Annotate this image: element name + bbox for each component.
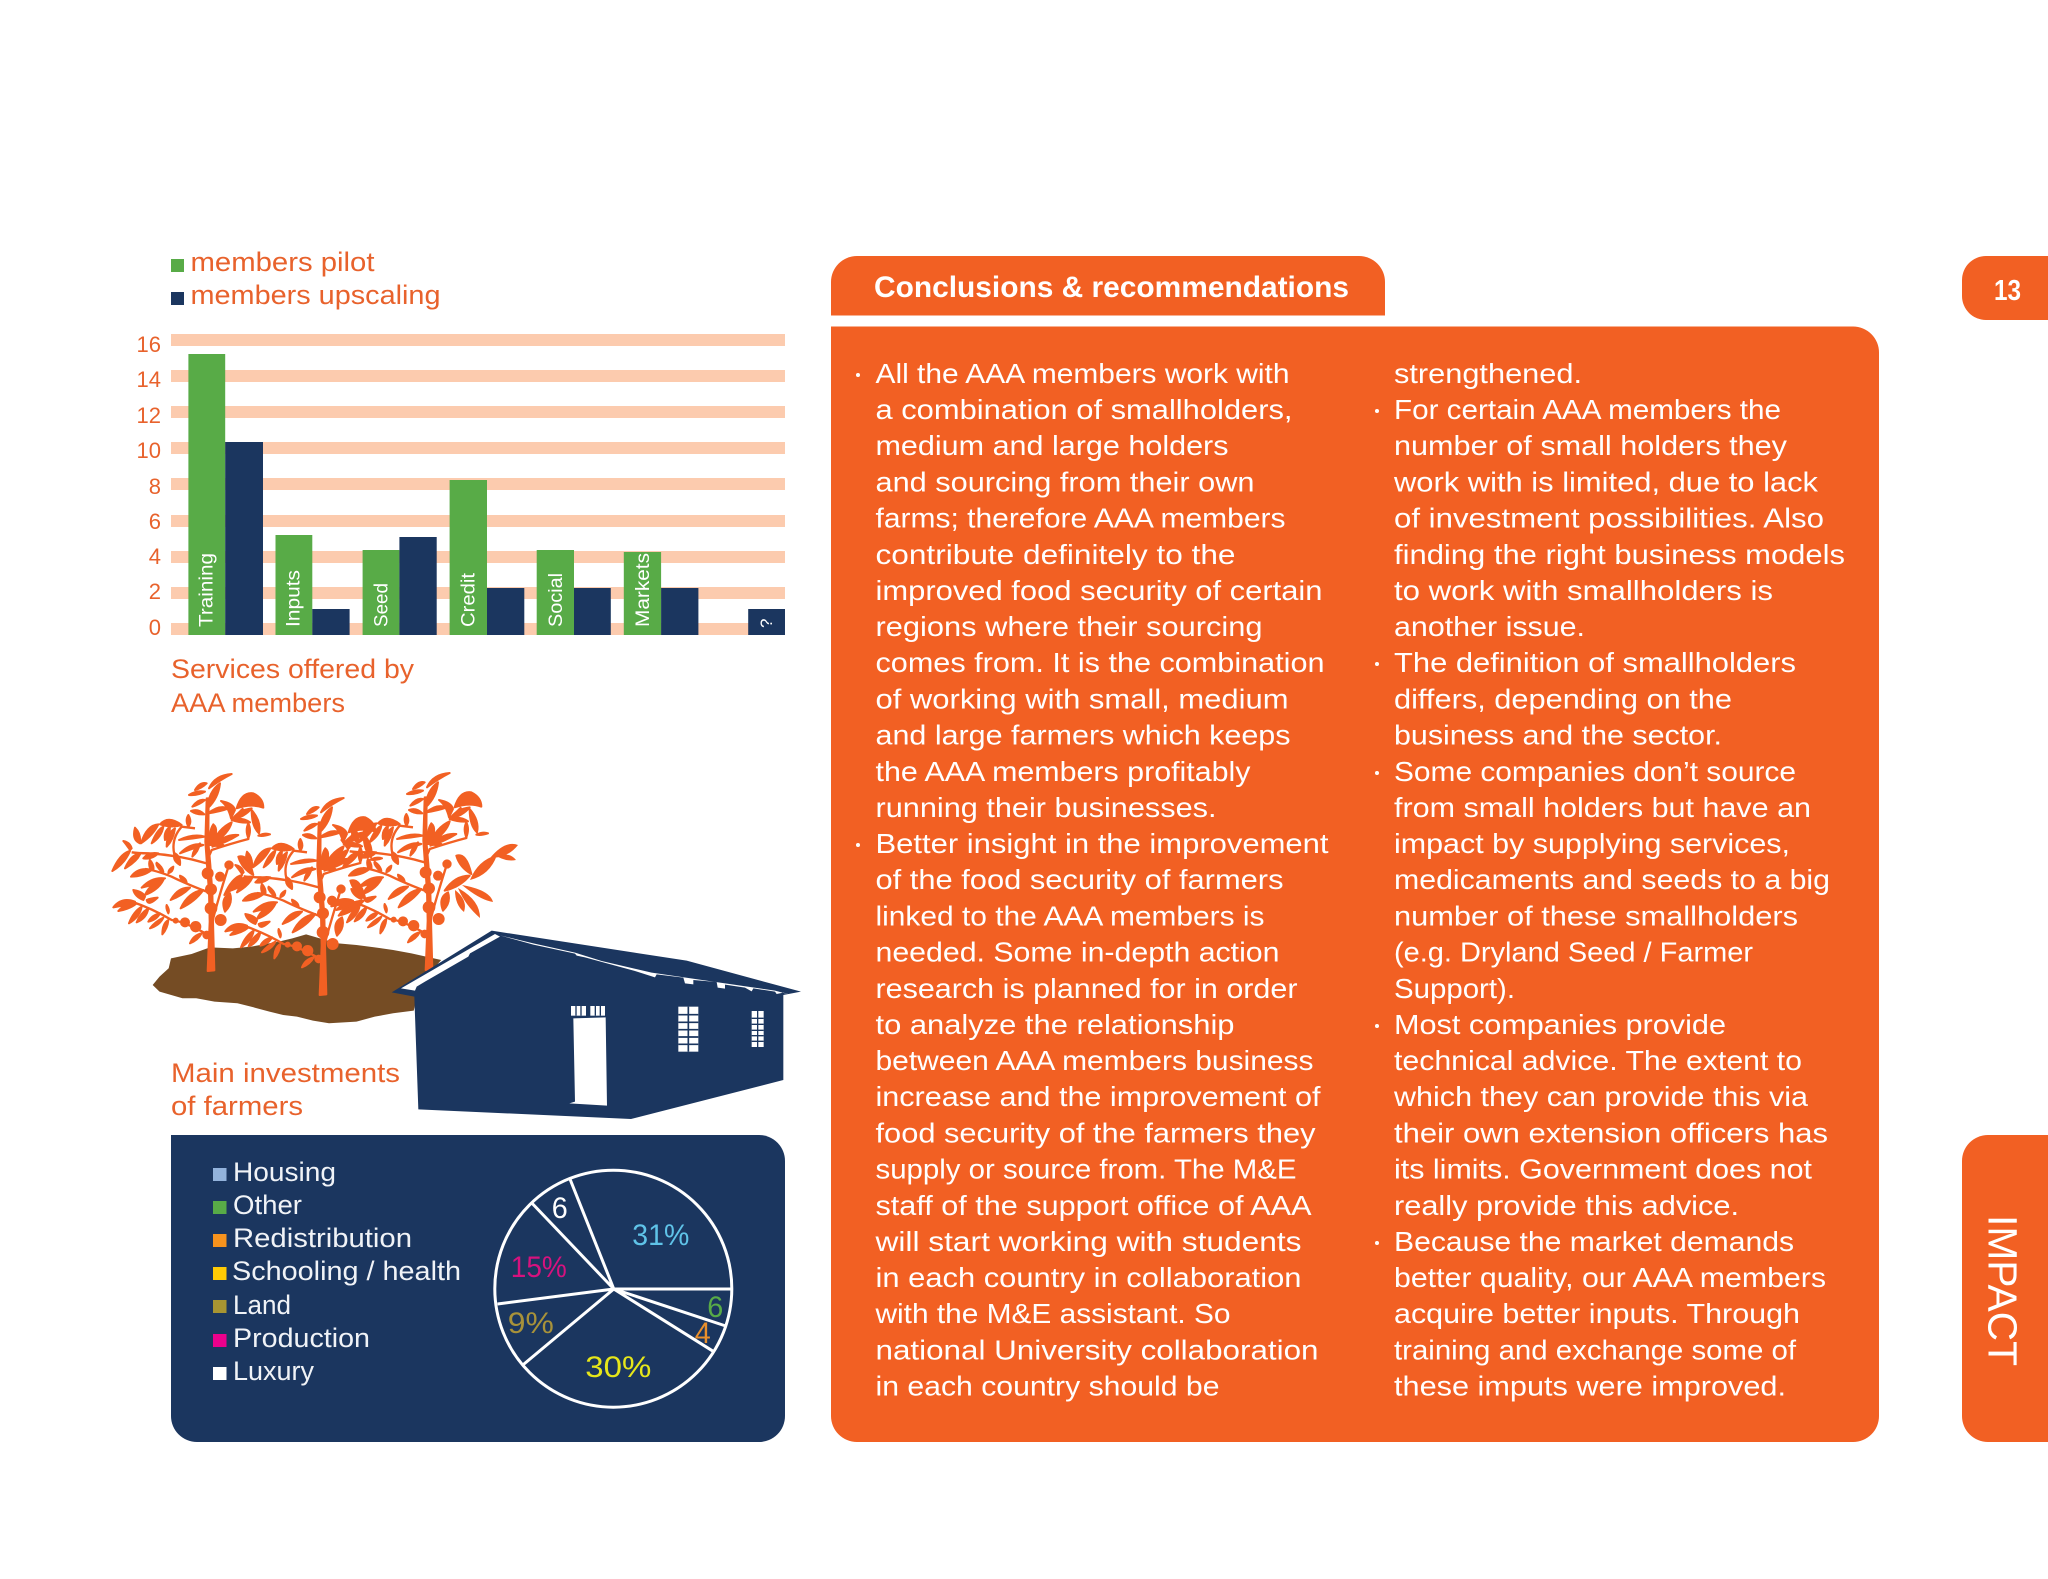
text column 1: of working with small, medium <box>876 684 1288 714</box>
text column 1: and large farmers which keeps <box>876 720 1290 750</box>
text column 1: comes from. It is the combination <box>876 647 1324 678</box>
pie chart: 6 <box>707 1291 723 1324</box>
text column 1: the AAA members profitably <box>876 756 1250 787</box>
bar labels: Inputs <box>284 570 304 627</box>
text column 1: staff of the support office of AAA <box>876 1190 1312 1221</box>
text column 1: to analyze the relationship <box>876 1009 1234 1040</box>
text column 1: Better insight in the improvement <box>876 828 1329 859</box>
text column 1: between AAA members business <box>876 1045 1314 1076</box>
illustration: house <box>392 931 801 1119</box>
y axis numbers: 8 <box>149 474 161 499</box>
text column 2: their own extension officers has <box>1394 1118 1828 1148</box>
chart caption: Services offered by <box>171 654 415 684</box>
text column 2: acquire better inputs. Through <box>1394 1298 1800 1329</box>
investments caption <box>171 1058 400 1121</box>
text column 1: and sourcing from their own <box>876 466 1254 498</box>
section tab: impact <box>1962 1135 2048 1442</box>
pie legend: Luxury <box>233 1356 314 1386</box>
chart legend: members pilot <box>190 247 375 277</box>
text column 1: needed. Some in-depth action <box>876 936 1280 968</box>
y axis numbers: 14 <box>137 367 161 392</box>
pie chart: 6 <box>552 1192 568 1225</box>
text column 2: Some companies don’t source <box>1394 756 1796 787</box>
illustration: soil mound <box>153 934 441 1023</box>
text column 1: in each country in collaboration <box>876 1262 1302 1293</box>
y axis numbers: 16 <box>137 332 161 357</box>
text column 2: to work with smallholders is <box>1394 575 1773 606</box>
pie legend: Redistribution <box>233 1223 412 1253</box>
panel: conclusions text <box>831 326 1879 1442</box>
text column 2: number of small holders they <box>1394 430 1787 461</box>
text column 2: work with is limited, due to lack <box>1393 466 1819 498</box>
text column 2: medicaments and seeds to a big <box>1394 864 1830 895</box>
chart legend: members upscaling <box>190 280 440 310</box>
text column 1: increase and the improvement of <box>876 1081 1321 1112</box>
heading tab: conclusions <box>831 256 1385 316</box>
pie chart: 4 <box>695 1317 711 1350</box>
text column 1: farms; therefore AAA members <box>876 502 1286 534</box>
text column 2: from small holders but have an <box>1394 792 1811 823</box>
text column 1: research is planned for in order <box>876 973 1298 1004</box>
text column 2: business and the sector. <box>1394 720 1722 750</box>
text column 1: improved food security of certain <box>876 575 1322 606</box>
chart caption: AAA members <box>171 688 345 718</box>
bar labels: Credit <box>458 572 480 627</box>
text column 1: in each country should be <box>876 1370 1220 1402</box>
bar labels: Seed <box>372 583 392 627</box>
text column 2: really provide this advice. <box>1394 1190 1739 1221</box>
text column 1: will start working with students <box>874 1226 1302 1257</box>
page number tab <box>1962 256 2048 320</box>
y axis numbers: 10 <box>137 438 161 463</box>
heading tab: conclusions: Conclusions & recommendations <box>874 271 1349 304</box>
pie chart <box>495 1170 732 1407</box>
pie legend: Other <box>233 1190 302 1220</box>
pie legend: Land <box>233 1290 291 1320</box>
text column 2: its limits. Government does not <box>1394 1154 1812 1184</box>
bars <box>188 354 785 635</box>
pie chart: 15% <box>511 1251 567 1284</box>
text column 1: national University collaboration <box>876 1334 1318 1366</box>
text column 1: linked to the AAA members is <box>876 900 1264 932</box>
bar labels: ? <box>757 619 776 628</box>
chart caption <box>171 654 415 718</box>
y axis numbers: 12 <box>137 403 161 428</box>
pie chart: 31% <box>632 1219 689 1252</box>
text column 1: supply or source from. The M&E <box>876 1154 1296 1184</box>
text column 1: a combination of smallholders, <box>876 394 1292 425</box>
text column 1: of the food security of farmers <box>876 864 1284 895</box>
bar labels: Markets <box>633 553 654 627</box>
investments caption: Main investments <box>171 1058 400 1088</box>
illustration: coffee plants <box>112 773 518 995</box>
section tab: impact: IMPACT <box>1980 1215 2026 1366</box>
text column 2: number of these smallholders <box>1394 900 1798 932</box>
text column 2: differs, depending on the <box>1394 684 1732 714</box>
y axis numbers: 0 <box>149 615 161 640</box>
text column 1: medium and large holders <box>876 430 1228 461</box>
panel: farmer investments <box>171 1135 785 1442</box>
bar labels <box>196 553 776 628</box>
text column 2: Most companies provide <box>1394 1009 1726 1040</box>
text column 1: running their businesses. <box>876 792 1216 823</box>
text column 2: training and exchange some of <box>1394 1334 1796 1366</box>
text column 1: regions where their sourcing <box>876 611 1262 642</box>
panel: services bar chart <box>137 247 785 718</box>
investments caption: of farmers <box>171 1091 303 1121</box>
text column 1: food security of the farmers they <box>876 1118 1316 1148</box>
pie legend: Production <box>233 1323 370 1353</box>
text column 1: with the M&E assistant. So <box>874 1298 1230 1329</box>
text column 2: technical advice. The extent to <box>1394 1045 1802 1076</box>
pie legend <box>213 1157 461 1386</box>
y axis numbers: 2 <box>149 579 161 604</box>
text column 2: Support). <box>1394 973 1515 1004</box>
text column 2: finding the right business models <box>1394 539 1845 570</box>
text column 2: Because the market demands <box>1394 1226 1794 1257</box>
y axis numbers: 6 <box>149 509 161 534</box>
text column 2: For certain AAA members the <box>1394 394 1781 425</box>
y axis numbers: 4 <box>149 544 161 569</box>
text column 2: The definition of smallholders <box>1394 647 1796 678</box>
text column 2: these imputs were improved. <box>1394 1370 1786 1402</box>
pie legend: Housing <box>233 1157 336 1187</box>
pie legend: Schooling / health <box>232 1256 461 1286</box>
text column 1: contribute definitely to the <box>876 539 1236 570</box>
text column 2: which they can provide this via <box>1393 1081 1808 1112</box>
pie chart: 30% <box>585 1351 651 1384</box>
text column 2: of investment possibilities. Also <box>1394 502 1824 534</box>
chart gridline bands <box>171 334 785 635</box>
y axis numbers <box>137 332 161 640</box>
text column 2: another issue. <box>1394 611 1585 642</box>
pie chart: 9% <box>508 1307 554 1340</box>
text column 2: strengthened. <box>1394 358 1582 389</box>
text column 2 <box>1375 358 1845 1402</box>
chart legend <box>171 247 440 310</box>
text column 2: (e.g. Dryland Seed / Farmer <box>1394 936 1753 968</box>
page number tab: 13 <box>1994 275 2021 307</box>
bar labels: Training <box>196 553 218 627</box>
bar labels: Social <box>546 573 567 627</box>
text column 2: better quality, our AAA members <box>1394 1262 1826 1293</box>
text column 1: All the AAA members work with <box>876 358 1290 389</box>
text column 2: impact by supplying services, <box>1394 828 1790 859</box>
text column 1 <box>856 358 1329 1402</box>
